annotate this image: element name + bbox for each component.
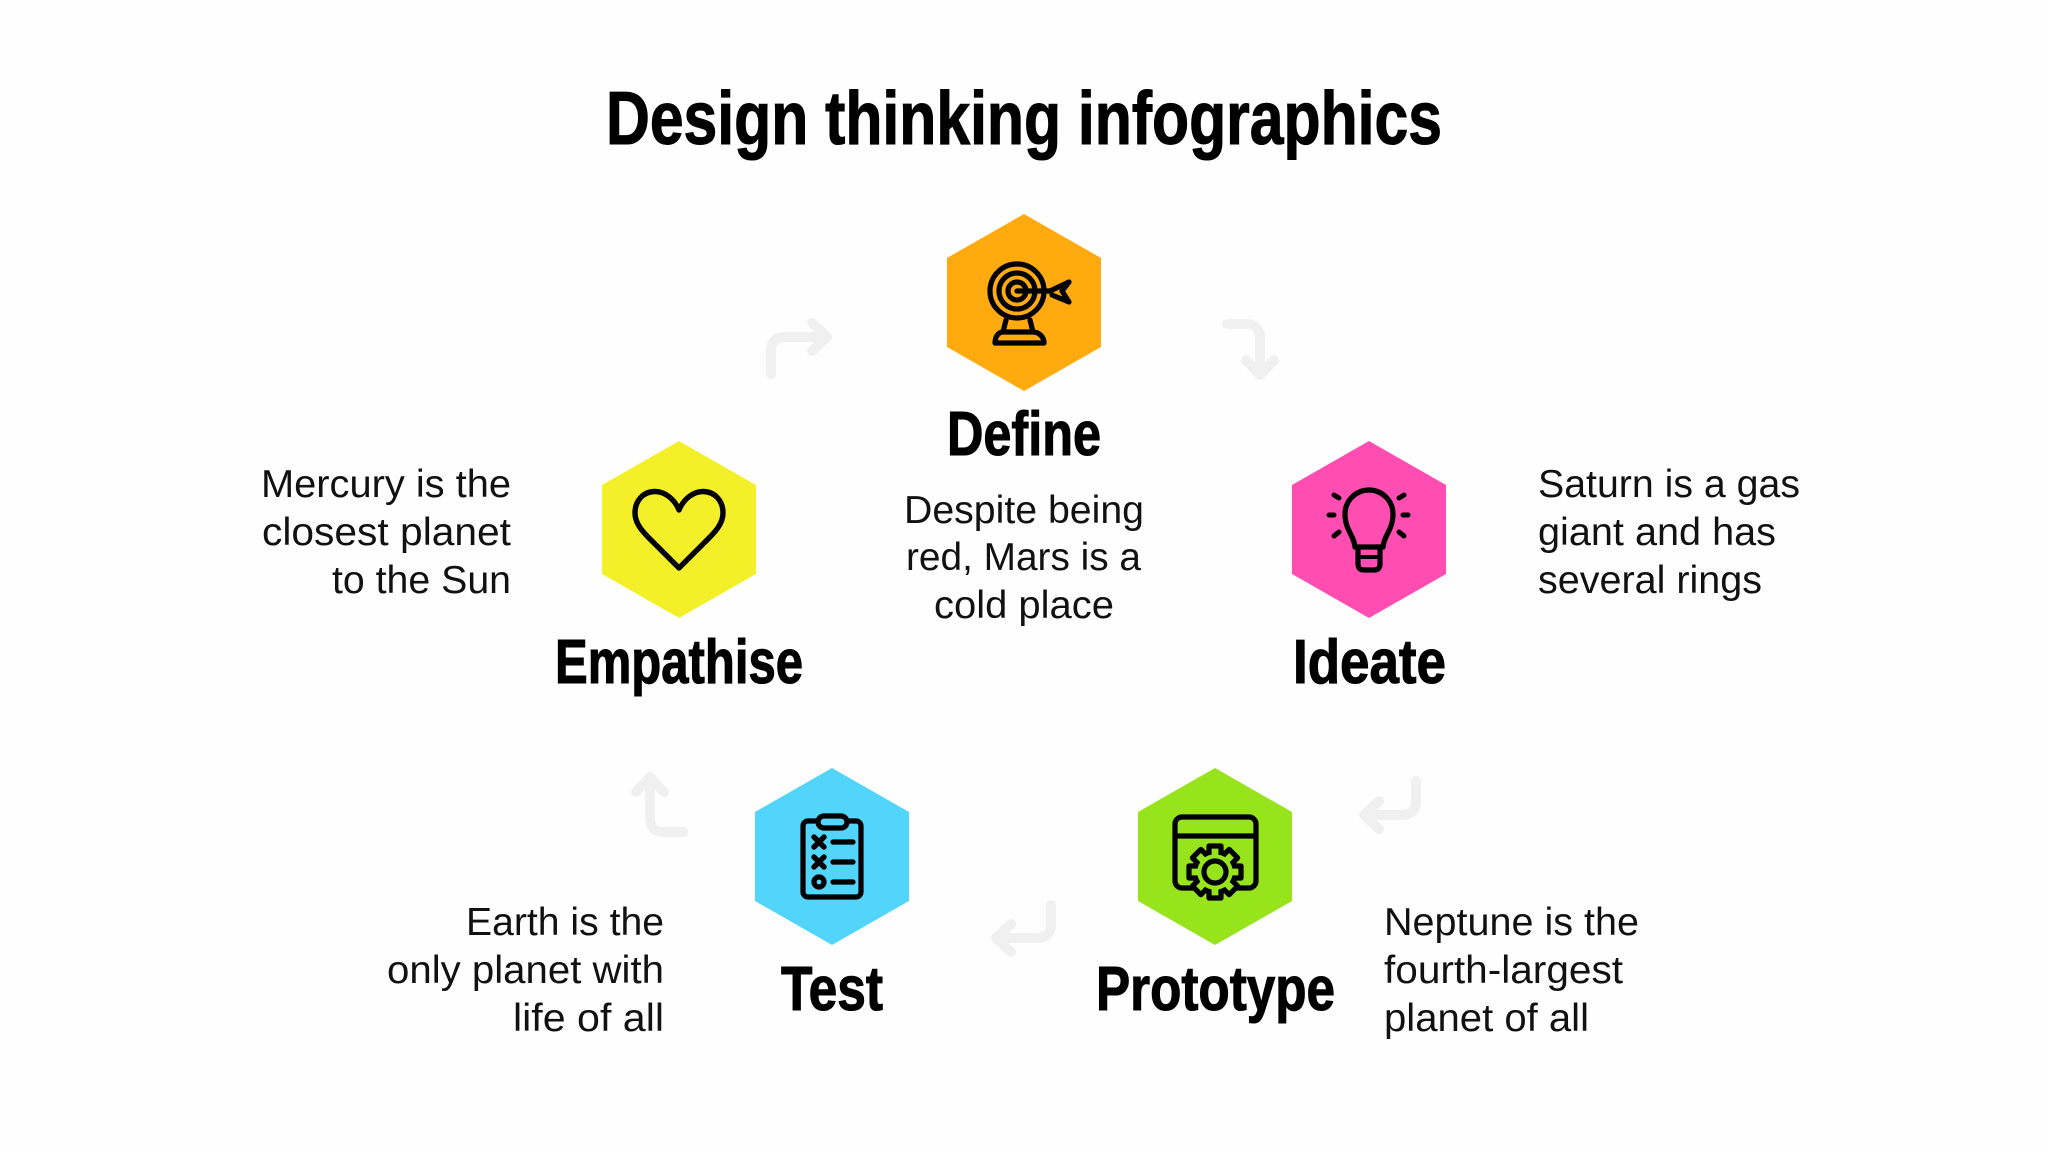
text: ideate description: giant and has: [1538, 511, 1776, 554]
icon: window with gear: [1175, 817, 1256, 898]
text: prototype description: planet of all: [1384, 997, 1589, 1040]
panel: test: [387, 768, 909, 1040]
panel: ideate: [1292, 441, 1800, 697]
text: define description: Despite being: [904, 489, 1144, 532]
text: prototype description: fourth-largest: [1384, 949, 1623, 992]
hexagon: ideate: [1292, 441, 1446, 618]
hexagon: define: [947, 214, 1101, 391]
hexagon: prototype: [1138, 768, 1292, 945]
icon: target with dart: [990, 264, 1069, 343]
panel: empathise: [261, 441, 803, 697]
arrow: test to empathise: [636, 777, 683, 832]
heading: empathise: Empathise: [555, 628, 803, 697]
text: prototype description: Neptune is the: [1384, 901, 1639, 944]
heading: prototype: Prototype: [1096, 955, 1335, 1024]
hexagon: test: [755, 768, 909, 945]
icon: heart: [635, 492, 723, 568]
text: test description: life of all: [513, 997, 664, 1040]
heading: define: Define: [947, 400, 1101, 469]
text: empathise description: [261, 463, 511, 602]
text: test description: Earth is the: [466, 901, 664, 944]
heading: test: Test: [781, 955, 883, 1024]
heading: ideate: Ideate: [1293, 628, 1446, 697]
arrow: ideate to prototype: [1364, 781, 1416, 829]
text: ideate description: [1538, 463, 1800, 602]
text: prototype description: [1384, 901, 1639, 1040]
text: empathise description: closest planet: [262, 511, 511, 554]
text: define description: [904, 489, 1144, 627]
arrow: define to ideate: [1227, 324, 1274, 375]
text: test description: only planet with: [387, 949, 664, 992]
icon: light bulb: [1329, 490, 1408, 570]
text: define description: cold place: [934, 584, 1114, 627]
panel: prototype: [1096, 768, 1639, 1040]
arrow: prototype to test: [996, 905, 1051, 952]
icon: clipboard checklist: [803, 816, 861, 897]
arrow: empathise to define: [771, 323, 827, 374]
title: Design thinking infographics: [606, 76, 1442, 160]
panel: define: [904, 214, 1144, 627]
text: ideate description: several rings: [1538, 559, 1762, 602]
text: define description: red, Mars is a: [906, 536, 1141, 579]
text: test description: [387, 901, 664, 1040]
hexagon: empathise: [602, 441, 756, 618]
text: empathise description: Mercury is the: [261, 463, 511, 506]
text: empathise description: to the Sun: [332, 559, 511, 602]
text: ideate description: Saturn is a gas: [1538, 463, 1800, 506]
